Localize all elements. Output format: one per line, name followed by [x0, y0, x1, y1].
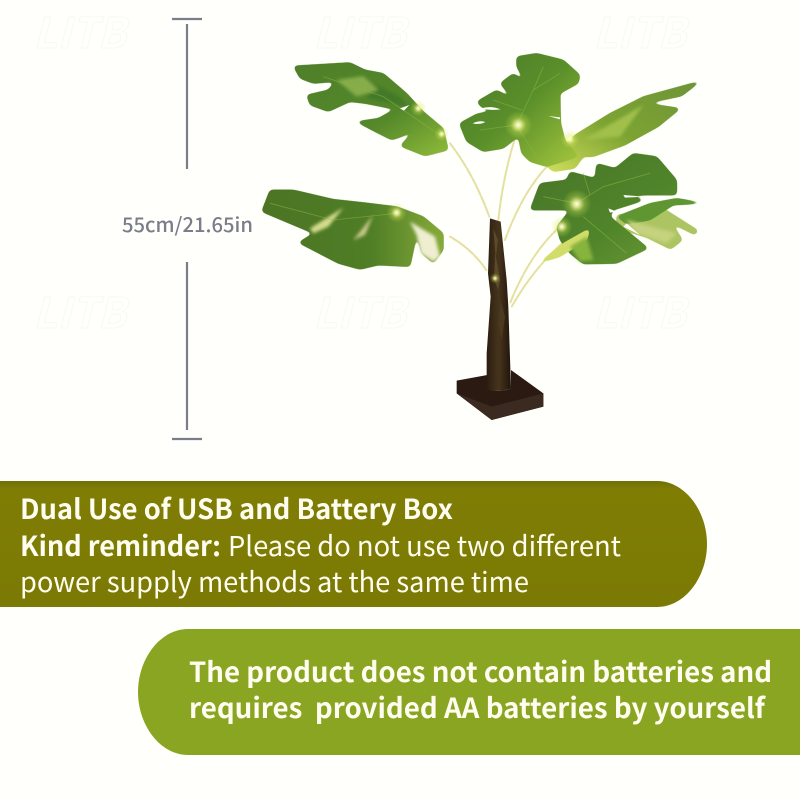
- panel: USB and battery reminder: [0, 481, 707, 607]
- height dimension marker: [122, 19, 253, 439]
- leaf: top centre: [459, 53, 580, 167]
- leaf: top left: [293, 63, 448, 156]
- dimension label: 55cm/21.65in: [122, 209, 253, 238]
- watermarks: LITB: [33, 280, 130, 341]
- base: [457, 370, 543, 420]
- leaf: right front frond: [617, 198, 707, 224]
- leaf holes: [400, 105, 643, 235]
- leaf: right lower back fronds: [617, 208, 698, 249]
- watermarks: LITB: [593, 0, 690, 61]
- leaf: lower glow frond: [538, 228, 590, 263]
- panel background: [138, 629, 800, 755]
- dimension bottom line: [172, 262, 202, 439]
- stems: [450, 133, 570, 307]
- leaf veins: [270, 67, 650, 253]
- leaf shading: [310, 76, 677, 262]
- plant illustration: [262, 53, 707, 420]
- note line 1: The product does not contain batteries and: [189, 650, 772, 690]
- watermarks: LITB: [593, 280, 690, 341]
- reminder text line 1: Please do not use two different: [228, 524, 621, 564]
- reminder text line 2: power supply methods at the same time: [20, 560, 529, 600]
- note line 2: requires provided AA batteries by yourself: [189, 686, 767, 726]
- tree trunk: [487, 218, 511, 391]
- watermarks: [33, 0, 690, 341]
- watermarks: LITB: [313, 0, 410, 61]
- leaf: right main: [530, 153, 677, 264]
- LED glows: [387, 100, 591, 284]
- reminder label: Kind reminder:: [20, 524, 221, 564]
- leaf: upper right narrow: [543, 81, 702, 172]
- watermarks: LITB: [33, 0, 130, 61]
- watermarks: LITB: [313, 280, 410, 341]
- panel background: [0, 481, 707, 607]
- leaf: left: [262, 190, 443, 269]
- dimension top line: [172, 19, 202, 169]
- panel: batteries note: [138, 629, 800, 755]
- heading: Dual Use of USB and Battery Box: [20, 487, 453, 527]
